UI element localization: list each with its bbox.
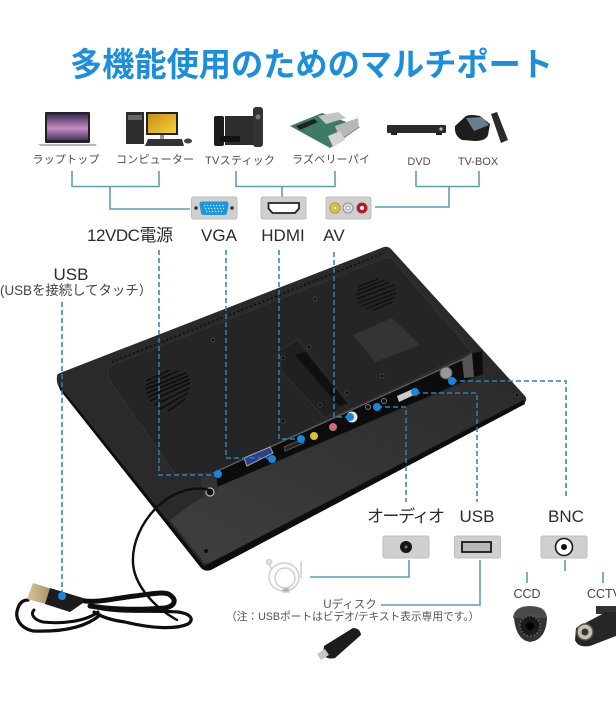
icon: USB stick <box>317 628 361 660</box>
label: AV: AV <box>323 226 345 245</box>
icon: TV box <box>455 112 508 143</box>
power jack boss <box>201 473 218 499</box>
port strip <box>205 351 483 490</box>
monitor back <box>57 247 526 571</box>
title: 多機能使用のためのマルチポート <box>70 46 553 83</box>
label: TV stick: TVスティック <box>205 154 275 167</box>
label: 12VDC power: 12VDC電源 <box>87 226 173 245</box>
icon: earphones <box>266 560 301 592</box>
USB port <box>397 388 416 402</box>
monitor bottom tray <box>170 375 522 563</box>
label: VGA: VGA <box>201 226 238 245</box>
label: USB disk: Uディスク <box>323 597 377 611</box>
AV jack red <box>329 423 337 431</box>
dashed vent line <box>112 253 384 362</box>
label: laptop: ラップトップ <box>32 153 100 166</box>
label: CCD: CCD <box>513 587 541 601</box>
note: connect USB for touch: (USBを接続してタッチ） <box>0 282 152 298</box>
cable bundle: left outer loop <box>17 600 100 631</box>
monitor lower edge <box>58 384 525 571</box>
speaker grille: right <box>356 279 396 311</box>
BNC end cap <box>462 353 474 378</box>
USB plug body <box>45 588 83 612</box>
VESA mount bracket <box>279 340 350 418</box>
screws <box>204 297 519 554</box>
port icon: audio jack <box>383 536 429 558</box>
mount slot <box>295 352 347 406</box>
label: HDMI: HDMI <box>261 226 305 245</box>
port callout dots <box>214 377 456 478</box>
USB plug metal <box>27 583 52 604</box>
connector lines: bottom <box>310 560 603 605</box>
cable bundle: left inner loop <box>32 610 98 623</box>
icon: TV stick <box>214 107 263 147</box>
port icon: HDMI <box>261 197 306 219</box>
sticker panel <box>353 318 420 362</box>
label: raspberry pi: ラズベリーパイ <box>292 152 370 166</box>
label: DVD: DVD <box>407 156 431 168</box>
label: USB: USB <box>54 265 88 284</box>
audio jacks <box>366 404 370 410</box>
port icon: BNC <box>541 536 587 558</box>
port icon: USB <box>454 536 500 558</box>
cable bundle: lower loop <box>90 606 191 628</box>
icon: raspberry pi <box>290 112 360 148</box>
note: USB port video/text only: （注：USBポートはビデオ/テキスト表示専用です。） <box>226 610 479 623</box>
port icon: VGA <box>192 197 237 219</box>
icon: dome camera <box>513 606 547 642</box>
USB cable dot <box>58 592 66 600</box>
AV jack white <box>346 412 358 422</box>
label: computer: コンピューター <box>116 153 194 166</box>
monitor outer frame <box>57 247 526 569</box>
speaker grille: left <box>146 370 190 411</box>
USB touch cable <box>17 489 210 631</box>
VGA port <box>244 447 273 466</box>
label: TV-BOX: TV-BOX <box>458 156 499 168</box>
label: BNC: BNC <box>548 507 584 526</box>
icon: bullet camera <box>575 606 616 646</box>
audio jack 2 <box>382 398 386 404</box>
icon: laptop <box>38 112 97 146</box>
jack socket <box>206 488 214 496</box>
cable bundle: upper thick <box>80 593 174 609</box>
label: USB port: USB <box>460 507 494 526</box>
port labels: top <box>87 226 345 245</box>
strip highlight <box>213 356 470 473</box>
BNC connector <box>440 367 452 379</box>
icon: computer <box>126 112 192 146</box>
AV jack yellow <box>310 432 318 440</box>
port icon: AV <box>326 197 371 219</box>
icon: DVD player <box>387 125 446 135</box>
connector lines: top <box>72 171 479 209</box>
bottom port labels <box>367 506 584 526</box>
HDMI port <box>284 439 304 451</box>
USB touch label <box>0 265 152 298</box>
label: audio: オーディオ <box>367 506 445 526</box>
raised inner panel <box>108 258 472 474</box>
dashed leader lines <box>62 250 566 596</box>
source devices row <box>32 107 508 168</box>
cable to jack <box>133 489 210 620</box>
